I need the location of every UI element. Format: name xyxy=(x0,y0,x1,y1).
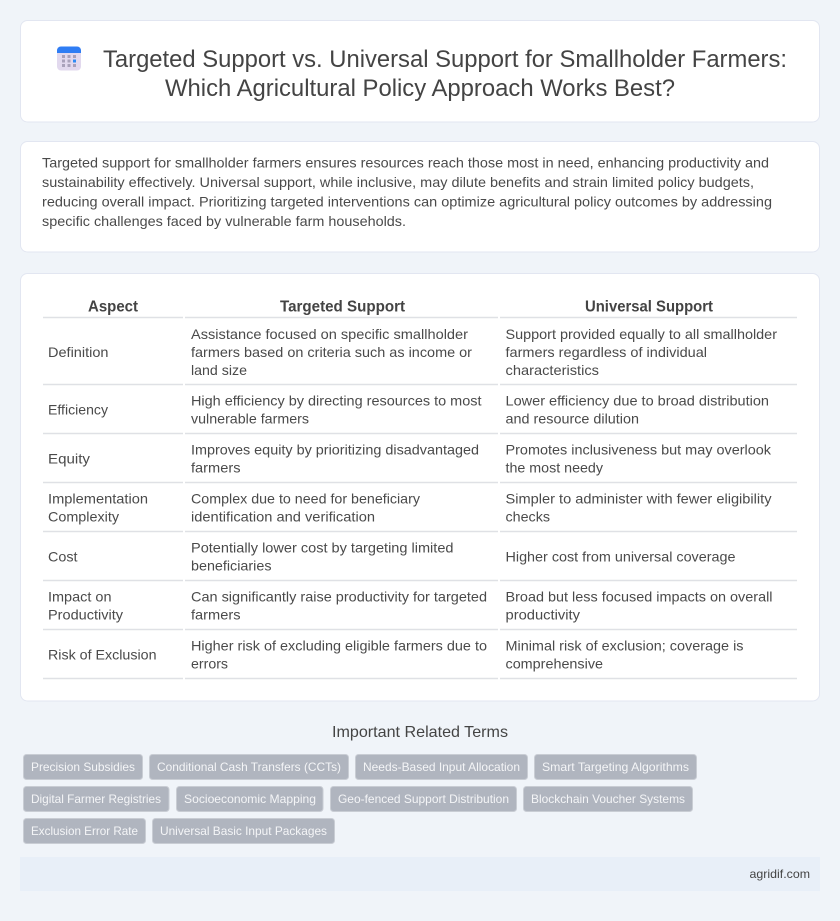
title: Which Agricultural Policy Approach Works Best? xyxy=(165,75,675,102)
row: impact on productivity: Broad but less focused impacts on overall xyxy=(506,588,772,604)
row: efficiency xyxy=(48,392,769,426)
panel: comparison table xyxy=(20,274,820,701)
related term tags: Socioeconomic Mapping xyxy=(184,792,316,806)
row: risk of exclusion: Risk of Exclusion xyxy=(48,646,156,662)
related term tags: Blockchain Voucher Systems xyxy=(531,792,685,806)
row: implementation complexity: Implementation xyxy=(48,490,148,506)
table header: Targeted Support xyxy=(280,298,406,316)
row: impact on productivity: Can significantly raise productivity for targeted xyxy=(191,588,487,604)
row: implementation complexity: Complex due to need for beneficiary xyxy=(191,490,420,506)
row: efficiency: Lower efficiency due to broad distribution xyxy=(506,392,769,408)
row: cost: beneficiaries xyxy=(191,558,272,574)
related term tags: Geo-fenced Support Distribution xyxy=(338,792,509,806)
title xyxy=(103,46,787,102)
row: risk of exclusion xyxy=(48,638,744,672)
row: definition: farmers based on criteria such as income or xyxy=(191,344,472,360)
icon: calendar xyxy=(57,46,81,70)
panel: summary text: reducing overall impact. Prioritizing targeted interventions can optimize agricultural policy outcomes by addressing xyxy=(42,194,772,210)
panel: summary text: specific challenges faced by vulnerable farm households. xyxy=(42,213,406,229)
row: impact on productivity: Productivity xyxy=(48,606,123,622)
row: equity: the most needy xyxy=(506,460,603,476)
table header: Aspect xyxy=(88,298,139,316)
panel: title card xyxy=(20,20,820,122)
row: risk of exclusion: Higher risk of excluding eligible farmers due to xyxy=(191,638,487,654)
related term tags xyxy=(24,754,696,844)
row: impact on productivity: Impact on xyxy=(48,588,112,604)
related term tags: Universal Basic Input Packages xyxy=(160,824,327,838)
row: efficiency: High efficiency by directing resources to most xyxy=(191,392,482,408)
row: definition xyxy=(48,326,777,378)
footer xyxy=(20,857,820,891)
related term tags: Digital Farmer Registries xyxy=(31,792,161,806)
related term tags: Precision Subsidies xyxy=(31,760,135,774)
row: definition: Definition xyxy=(48,344,108,360)
related term tags: Smart Targeting Algorithms xyxy=(542,760,689,774)
panel: summary text: Targeted support for smallholder farmers ensures resources reach those most in need, enhancing productivity and xyxy=(42,154,769,170)
row: definition: land size xyxy=(191,362,247,378)
table header xyxy=(88,298,714,316)
row: efficiency: Efficiency xyxy=(48,402,108,418)
row: definition: Support provided equally to all smallholder xyxy=(506,326,777,342)
row: risk of exclusion: errors xyxy=(191,656,228,672)
row: cost xyxy=(48,540,736,574)
row: risk of exclusion: Minimal risk of exclusion; coverage is xyxy=(506,638,744,654)
related term tags: Conditional Cash Transfers (CCTs) xyxy=(157,760,341,774)
heading: important related terms: Important Related Terms xyxy=(332,724,508,741)
related term tags: Needs-Based Input Allocation xyxy=(363,760,520,774)
row: implementation complexity: Simpler to administer with fewer eligibility xyxy=(506,490,772,506)
table header: Universal Support xyxy=(585,298,714,316)
row: implementation complexity: Complexity xyxy=(48,508,119,524)
row: implementation complexity: identification and verification xyxy=(191,508,375,524)
row: equity: Improves equity by prioritizing disadvantaged xyxy=(191,442,479,458)
panel: summary text xyxy=(20,142,820,252)
row: definition: characteristics xyxy=(506,362,599,378)
row: definition: Assistance focused on specific smallholder xyxy=(191,326,468,342)
row: risk of exclusion: comprehensive xyxy=(506,656,603,672)
title: Targeted Support vs. Universal Support for Smallholder Farmers: xyxy=(103,46,787,73)
row: cost: Potentially lower cost by targeting limited xyxy=(191,540,454,556)
row: cost: Cost xyxy=(48,548,78,564)
row: equity: Promotes inclusiveness but may overlook xyxy=(506,442,772,458)
row: definition: farmers regardless of individual xyxy=(506,344,707,360)
row: implementation complexity xyxy=(48,490,772,524)
related term tags: Exclusion Error Rate xyxy=(31,824,138,838)
row: cost: Higher cost from universal coverage xyxy=(506,548,736,564)
row: efficiency: and resource dilution xyxy=(506,410,639,426)
panel: summary text: sustainability effectively. Universal support, while inclusive, may dilute benefits and strain limited policy budgets, xyxy=(42,174,754,190)
footer: agridif.com xyxy=(750,867,810,881)
row: impact on productivity: productivity xyxy=(506,606,580,622)
row: equity: farmers xyxy=(191,460,240,476)
row: implementation complexity: checks xyxy=(506,508,550,524)
row: equity: Equity xyxy=(48,450,90,466)
row: efficiency: vulnerable farmers xyxy=(191,410,309,426)
row: impact on productivity: farmers xyxy=(191,606,240,622)
row: impact on productivity xyxy=(48,588,772,622)
row: equity xyxy=(48,442,772,476)
